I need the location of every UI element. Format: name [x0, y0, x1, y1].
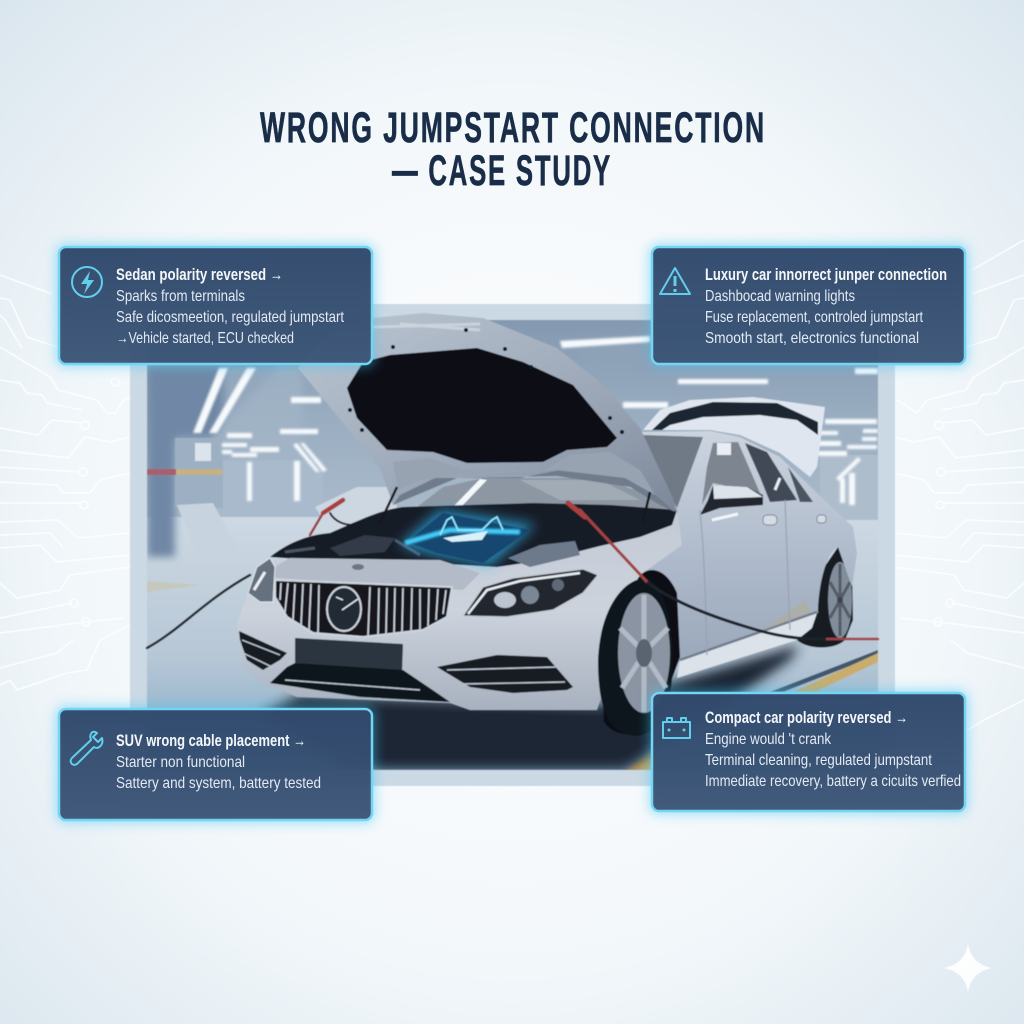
trunk lid — [643, 397, 825, 477]
grille — [275, 564, 452, 637]
number plate — [295, 638, 403, 673]
windshield — [417, 478, 677, 510]
photo: car in parking garage — [130, 304, 895, 786]
text: sedan case: Safe dicosmeetion, regulated jumpstart — [116, 309, 344, 326]
text: luxury case: Luxury car innorrect junper connection — [705, 266, 947, 284]
text: luxury case: Smooth start, electronics functional — [705, 330, 919, 347]
title: — CASE STUDY — [392, 147, 612, 195]
icon: wrench — [71, 732, 102, 765]
card: sedan polarity reversed — [56, 244, 375, 367]
engine bay — [270, 503, 677, 567]
icon: sparkle watermark — [944, 944, 992, 992]
front body — [237, 510, 682, 710]
text: suv case: Starter non functional — [116, 754, 245, 771]
open hood — [298, 313, 677, 523]
text: sedan case — [116, 266, 344, 347]
shadow under car — [260, 645, 800, 770]
windshield side glass — [643, 435, 703, 508]
text: compact case: Terminal cleaning, regulated jumpstant — [705, 752, 932, 769]
circuit lines left — [0, 275, 132, 690]
text: compact case — [705, 709, 961, 790]
text: compact case: Engine would 't crank — [705, 731, 832, 748]
card: compact car polarity reversed — [649, 690, 968, 814]
icon: warning triangle — [660, 268, 690, 294]
icon: battery — [663, 718, 690, 738]
text: luxury case: Dashbocad warning lights — [705, 288, 855, 305]
garage scene — [147, 320, 878, 770]
text: sedan case: Sparks from terminals — [116, 288, 245, 305]
text: compact case: Compact car polarity reversed → — [705, 709, 908, 727]
text: sedan case: →Vehicle started, ECU checked — [116, 330, 294, 347]
lower bumper intakes — [239, 631, 287, 670]
jumper cables — [147, 500, 878, 648]
side windows — [702, 442, 760, 505]
rear wheel — [797, 547, 853, 648]
text: suv case — [116, 732, 321, 792]
photo frame — [130, 304, 895, 786]
circuit lines right — [894, 240, 1024, 745]
mirror — [700, 485, 763, 515]
hood surface — [275, 558, 480, 590]
car body — [237, 431, 857, 736]
text: compact case: Immediate recovery, battery a cicuits verfied — [705, 773, 961, 790]
roof and side body — [610, 431, 857, 663]
text: luxury case: Fuse replacement, controled jumpstart — [705, 309, 923, 326]
front wheel — [598, 578, 673, 736]
title — [260, 104, 766, 195]
distant car — [315, 486, 397, 518]
card: luxury car incorrect jumper connection — [649, 244, 968, 367]
door lines and handles — [700, 500, 790, 655]
wheel arch — [600, 570, 680, 734]
text: suv case: Sattery and system, battery tested — [116, 775, 321, 792]
text: luxury case — [705, 266, 947, 347]
headlights — [463, 569, 598, 617]
text: sedan case: Sedan polarity reversed → — [116, 266, 283, 284]
floor markings — [770, 650, 878, 692]
icon: lightning bolt — [72, 267, 102, 297]
text: suv case: SUV wrong cable placement → — [116, 732, 306, 750]
card: suv wrong cable placement — [56, 706, 375, 823]
ceiling lights — [193, 336, 878, 505]
glowing ECU — [400, 510, 535, 566]
